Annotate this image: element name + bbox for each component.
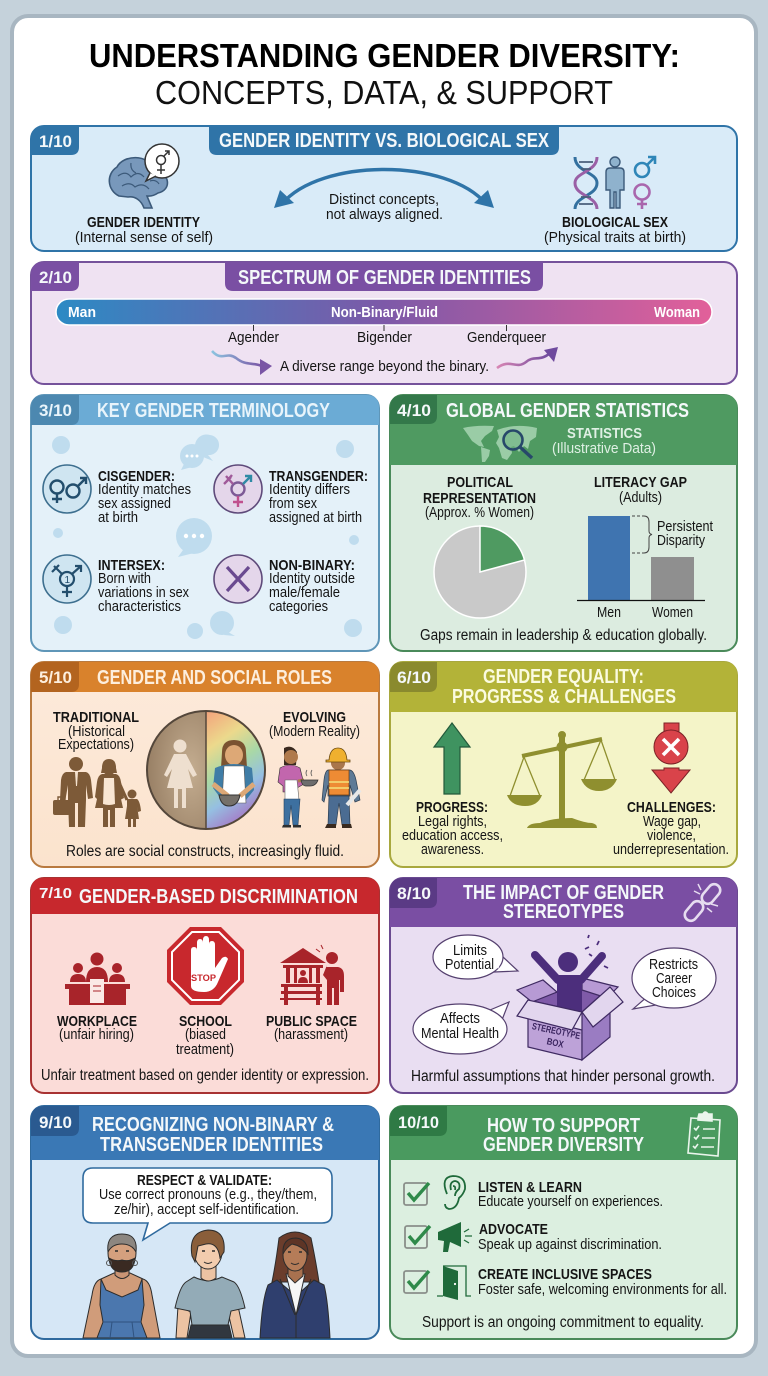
panel 10 heading: GENDER DIVERSITY <box>483 1134 645 1156</box>
label: traditional <box>53 709 139 753</box>
panel 9 heading: TRANSGENDER IDENTITIES <box>100 1134 323 1156</box>
term: non-binary <box>269 557 355 615</box>
icon: person breaking out of stereotype box: BOX <box>546 1036 565 1051</box>
label: evolving <box>269 709 360 740</box>
speech bubble: restricts career choices: Restricts <box>649 956 698 973</box>
footer text: Roles are social constructs, increasingly fluid. <box>66 843 344 860</box>
panel 3 number badge: 3/10 <box>39 402 72 420</box>
icon: person breaking out of stereotype box <box>517 935 623 1060</box>
footer text: Gaps remain in leadership & education globally. <box>420 627 707 644</box>
panel 7: gender-based discrimination <box>31 878 379 1093</box>
text: challenges <box>613 799 729 858</box>
icon: construction worker <box>322 748 360 828</box>
spectrum bar: Woman <box>654 305 700 321</box>
panel 6 number badge <box>390 662 437 692</box>
panel 6: gender equality <box>390 662 737 867</box>
label: literacy gap: LITERACY GAP <box>594 474 687 491</box>
term: non-binary: categories <box>269 598 328 615</box>
panel 10 heading: HOW TO SUPPORT <box>487 1115 640 1137</box>
term: transgender: assigned at birth <box>269 509 362 526</box>
panel 4 header: (Illustrative Data) <box>552 440 656 457</box>
panel 1: gender identity vs biological sex <box>31 126 737 251</box>
bar chart <box>577 516 705 621</box>
panel 5 heading <box>31 662 379 692</box>
icon: woman cooking with pan <box>278 747 318 828</box>
panel 2 number badge: 2/10 <box>39 269 72 287</box>
term: transgender: Identity differs <box>269 481 350 498</box>
panel 8 number badge: 8/10 <box>397 885 431 903</box>
term: intersex: Born with <box>98 570 151 587</box>
label: workplace: WORKPLACE <box>57 1013 137 1030</box>
icon: traditional family <box>53 757 141 827</box>
label: public space: (harassment) <box>274 1026 348 1043</box>
checklist: advocate: ADVOCATE <box>479 1221 548 1238</box>
callout: persistent disparity: Persistent <box>657 518 714 535</box>
text: challenges: Wage gap, <box>643 813 701 830</box>
bar chart: Women <box>652 604 693 621</box>
panel 4 header <box>390 395 737 465</box>
term: transgender: from sex <box>269 495 317 512</box>
term: intersex: variations in sex <box>98 584 189 601</box>
label: school: SCHOOL <box>179 1013 232 1030</box>
panel 6 number badge: 6/10 <box>397 669 431 687</box>
panel 5 number badge: 5/10 <box>39 669 72 687</box>
illustration: person in navy suit <box>260 1232 330 1338</box>
pie chart <box>434 526 526 618</box>
spectrum bar: Non-Binary/Fluid <box>331 305 438 321</box>
label: workplace: (unfair hiring) <box>59 1026 134 1043</box>
panel 2: spectrum of gender identities <box>31 262 737 384</box>
illustration: person with beard in blue dress <box>83 1234 160 1338</box>
label: traditional: Expectations) <box>58 736 134 753</box>
icon: transgender symbol <box>214 465 262 513</box>
panel 10: how to support gender diversity <box>390 1106 737 1339</box>
arrow: right squiggle <box>497 347 558 368</box>
label: public space <box>266 1013 357 1043</box>
icon: brain with gender speech bubble <box>109 144 179 208</box>
footer text: Harmful assumptions that hinder personal growth. <box>411 1068 715 1085</box>
arrow: double-headed arc <box>274 170 494 208</box>
title: CONCEPTS, DATA, & SUPPORT <box>155 74 613 111</box>
panel 5: gender and social roles <box>31 662 379 867</box>
panel 10 heading <box>390 1106 737 1160</box>
speech bubble: affects mental health: Mental Health <box>421 1025 499 1042</box>
label: evolving: (Modern Reality) <box>269 723 360 740</box>
icon: balance scales <box>507 732 617 828</box>
term: intersex <box>98 557 189 615</box>
callout: persistent disparity <box>657 518 714 549</box>
panel 8 heading <box>390 878 737 927</box>
label: political representation: REPRESENTATION <box>423 490 536 507</box>
label: biological sex: (Physical traits at birth) <box>544 229 686 246</box>
spectrum bar <box>56 299 712 325</box>
label: workplace <box>57 1013 137 1043</box>
text: diverse range: A diverse range beyond the binary. <box>280 358 489 375</box>
text: progress <box>402 799 503 858</box>
panel 9 heading <box>31 1106 379 1160</box>
panel 1 number badge: 1/10 <box>39 133 72 151</box>
spectrum marker: bigender: Bigender <box>357 329 412 346</box>
speech bubble: limits potential: Potential <box>445 956 494 973</box>
panel 3 heading: KEY GENDER TERMINOLOGY <box>97 400 331 422</box>
term: cisgender <box>98 468 191 526</box>
panel 4 header: GLOBAL GENDER STATISTICS <box>446 400 689 422</box>
icon: central split circle <box>147 711 265 829</box>
panel 6 heading <box>390 662 737 712</box>
panel 7 number: 7/10 <box>39 885 72 902</box>
icon: stop hand octagon: STOP <box>191 973 216 983</box>
label: political representation <box>423 474 536 521</box>
spectrum bar: Man <box>68 305 96 321</box>
icon: cisgender symbols <box>43 465 91 513</box>
icon: woman silhouette <box>164 740 197 808</box>
label: literacy gap: (Adults) <box>619 489 662 506</box>
checklist: listen and learn <box>404 1176 663 1210</box>
panel 6 heading: PROGRESS & CHALLENGES <box>452 686 676 708</box>
callout: persistent disparity: Disparity <box>657 532 705 549</box>
illustration: person in grey t-shirt <box>175 1230 245 1338</box>
term: transgender: TRANSGENDER: <box>269 468 368 485</box>
text: challenges: violence, <box>647 827 696 844</box>
term: non-binary: male/female <box>269 584 340 601</box>
icon: intersex symbol <box>43 555 91 603</box>
label: gender identity: (Internal sense of self) <box>75 229 213 246</box>
arrow: left squiggle <box>212 351 272 375</box>
callout: respect and validate: Use correct pronouns (e.g., they/them, <box>99 1186 317 1203</box>
footer text: Support is an ongoing commitment to equality. <box>422 1314 704 1331</box>
term: intersex: characteristics <box>98 598 181 615</box>
checklist: create inclusive spaces <box>404 1266 727 1300</box>
text: distinct concepts <box>326 191 443 223</box>
panel 4: global gender statistics <box>390 395 737 651</box>
label: school: treatment) <box>176 1041 234 1058</box>
title: UNDERSTANDING GENDER DIVERSITY: <box>89 37 680 74</box>
arrow: progress up <box>434 723 470 794</box>
panel 4 number badge <box>390 395 437 424</box>
checklist: advocate <box>405 1221 662 1253</box>
text: distinct concepts: Distinct concepts, <box>329 191 439 208</box>
label: gender identity <box>75 214 213 246</box>
bar chart: Men <box>597 604 621 621</box>
checklist: advocate: Speak up against discrimination. <box>478 1236 662 1253</box>
icon: DNA, person and sex symbols <box>575 157 655 209</box>
panel 9 number badge: 9/10 <box>39 1114 72 1132</box>
decorative chat bubbles <box>52 434 362 639</box>
checklist: listen and learn: LISTEN & LEARN <box>478 1179 582 1196</box>
panel 3 heading <box>31 395 379 425</box>
panel 3: key gender terminology <box>31 395 379 651</box>
term: cisgender: sex assigned <box>98 495 171 512</box>
checklist: listen and learn: Educate yourself on experiences. <box>478 1193 663 1210</box>
panel 7 heading: GENDER-BASED DISCRIMINATION <box>79 886 358 908</box>
label: traditional: TRADITIONAL <box>53 709 139 726</box>
panel 2 heading: SPECTRUM OF GENDER IDENTITIES <box>238 267 531 289</box>
speech bubble: restricts career choices: Career <box>656 970 692 987</box>
speech bubble: affects mental health: Affects <box>440 1010 480 1027</box>
text: progress: awareness. <box>421 841 484 858</box>
spectrum marker: agender: Agender <box>228 329 279 346</box>
icon: workplace hiring panel <box>65 952 130 1005</box>
panel 9 heading: RECOGNIZING NON-BINARY & <box>92 1114 334 1136</box>
spectrum marker: genderqueer: Genderqueer <box>467 329 546 346</box>
icon: clipboard checklist <box>688 1112 720 1156</box>
label: evolving: EVOLVING <box>283 709 346 726</box>
checklist: create inclusive spaces: CREATE INCLUSIVE SPACES <box>478 1266 652 1283</box>
callout: respect and validate: ze/hir), accept self-identification. <box>114 1201 299 1218</box>
speech bubble: affects mental health <box>413 1002 509 1054</box>
icon: person breaking out of stereotype box: STEREOTYPE <box>531 1021 581 1042</box>
icon: woman with apron cooking <box>213 740 254 806</box>
panel 10 number badge: 10/10 <box>398 1114 439 1132</box>
panel 5 number badge <box>31 662 79 692</box>
panel 6 heading: GENDER EQUALITY: <box>483 666 644 688</box>
panel 4 number badge: 4/10 <box>397 402 431 420</box>
term: cisgender: Identity matches <box>98 481 191 498</box>
callout: respect and validate <box>83 1168 332 1240</box>
term: cisgender: CISGENDER: <box>98 468 175 485</box>
text: progress: education access, <box>402 827 503 844</box>
label: school <box>176 1013 234 1058</box>
panel 8 number badge <box>390 878 437 908</box>
panel 9 number badge <box>31 1106 79 1136</box>
footer text: Unfair treatment based on gender identity or expression. <box>41 1067 369 1084</box>
icon: broken chain <box>682 882 723 923</box>
panel 9: recognizing non-binary and transgender identities <box>31 1106 379 1339</box>
panel 3 number badge <box>31 395 79 425</box>
checklist: create inclusive spaces: Foster safe, welcoming environments for all. <box>478 1281 727 1298</box>
term: non-binary: NON-BINARY: <box>269 557 355 574</box>
label: literacy gap <box>594 474 687 506</box>
panel 7 heading <box>31 878 379 914</box>
label: traditional: (Historical <box>68 723 125 740</box>
panel 1 number badge <box>31 126 79 155</box>
panel 2 number badge <box>31 262 79 291</box>
panel 10 number badge <box>390 1106 447 1136</box>
panel 4 header: STATISTICS <box>567 425 642 442</box>
label: public space: PUBLIC SPACE <box>266 1013 357 1030</box>
icon: non-binary X <box>214 555 262 603</box>
term: intersex: INTERSEX: <box>98 557 165 574</box>
label: political representation: POLITICAL <box>447 474 513 491</box>
panel 8 heading: STEREOTYPES <box>503 901 624 923</box>
speech bubble: restricts career choices: Choices <box>652 984 696 1001</box>
callout: respect and validate: RESPECT & VALIDATE: <box>137 1172 272 1189</box>
speech bubble: limits potential <box>433 935 518 979</box>
text: progress: Legal rights, <box>418 813 487 830</box>
term: cisgender: at birth <box>98 509 138 526</box>
speech bubble: restricts career choices <box>632 948 716 1009</box>
icon: stop hand octagon <box>167 927 244 1005</box>
panel 1 heading <box>209 126 559 155</box>
icon: public space harassment <box>280 945 344 1005</box>
term: non-binary: Identity outside <box>269 570 355 587</box>
label: biological sex: BIOLOGICAL SEX <box>562 214 668 231</box>
panel 8 heading: THE IMPACT OF GENDER <box>463 882 664 904</box>
panel 1 heading: GENDER IDENTITY VS. BIOLOGICAL SEX <box>219 130 550 152</box>
text: distinct concepts: not always aligned. <box>326 206 443 223</box>
label: school: (biased <box>185 1026 226 1043</box>
icon: world map and magnifier <box>463 426 537 462</box>
panel 5 heading: GENDER AND SOCIAL ROLES <box>97 667 332 689</box>
speech bubble: limits potential: Limits <box>453 942 487 959</box>
label: gender identity: GENDER IDENTITY <box>87 214 200 231</box>
title <box>89 37 680 111</box>
label: biological sex <box>544 214 686 246</box>
panel 8: impact of gender stereotypes <box>390 878 737 1093</box>
text: challenges: underrepresentation. <box>613 841 729 858</box>
icon: intersex symbol: 1 <box>64 575 70 586</box>
text: progress: PROGRESS: <box>416 799 488 816</box>
arrow: challenges down with X <box>652 723 690 793</box>
label: political representation: (Approx. % Women) <box>425 504 534 521</box>
text: challenges: CHALLENGES: <box>627 799 716 816</box>
term: transgender <box>269 468 368 526</box>
panel 2 heading <box>225 262 543 291</box>
